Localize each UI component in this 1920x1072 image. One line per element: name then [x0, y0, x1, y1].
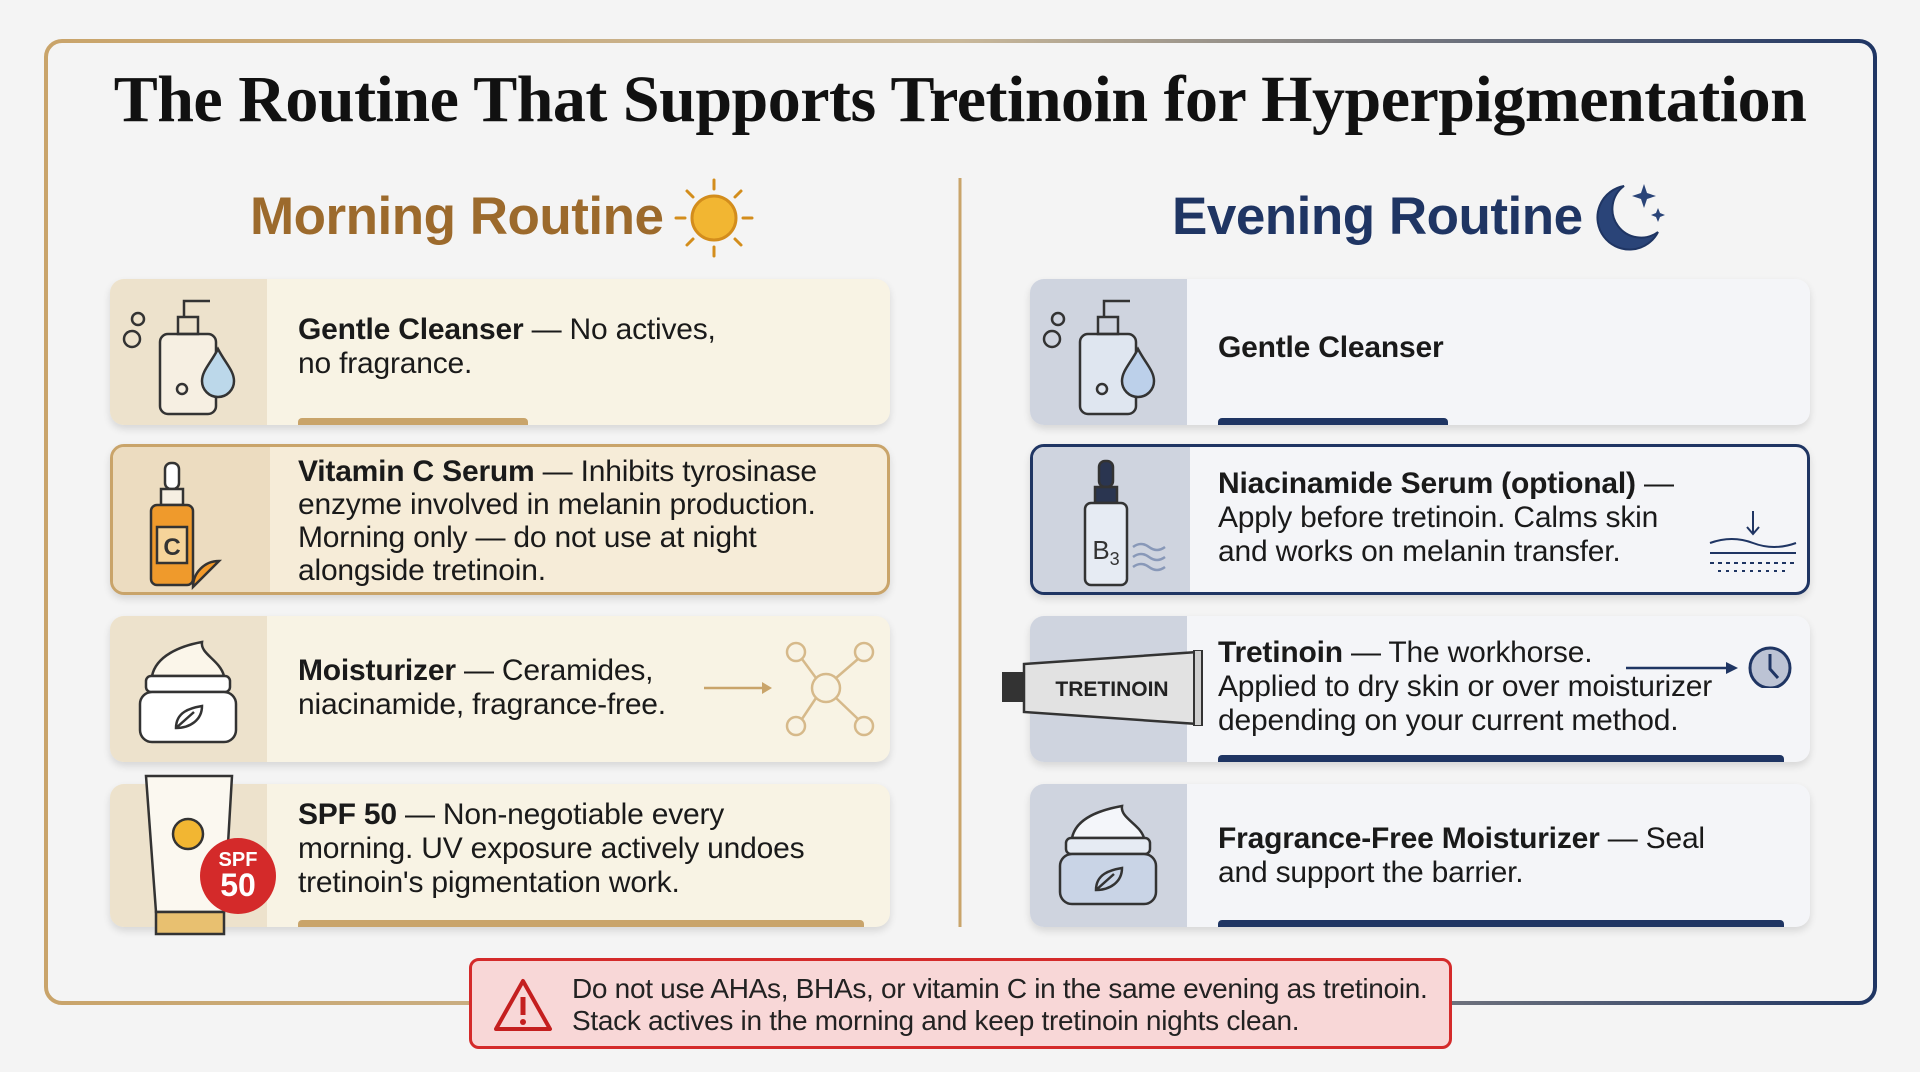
text: and support the barrier. — [1218, 856, 1523, 889]
text: Do not use AHAs, BHAs, or vitamin C in the same evening as tretinoin. — [572, 973, 1428, 1004]
text — [572, 973, 1428, 1036]
text: Gentle Cleanser — [1218, 331, 1443, 364]
text: Moisturizer — Ceramides, — [298, 654, 653, 687]
text — [298, 654, 666, 721]
panel: morning card 3 — [110, 616, 890, 762]
text: tretinoin's pigmentation work. — [298, 866, 680, 899]
text: depending on your current method. — [1218, 704, 1678, 737]
text: Gentle Cleanser — No actives, — [298, 313, 716, 346]
icon: sunscreen tube — [144, 774, 276, 936]
text: morning. UV exposure actively undoes — [298, 832, 804, 865]
text — [1218, 822, 1705, 889]
text: Tretinoin — The workhorse. — [1218, 636, 1592, 669]
text: Morning only — do not use at night — [298, 521, 756, 554]
icon: sun — [674, 178, 754, 258]
text — [1218, 467, 1674, 568]
icon: sunscreen tube: SPF — [219, 849, 257, 871]
text: Apply before tretinoin. Calms skin — [1218, 501, 1658, 534]
icon: B3 serum — [1033, 447, 1190, 598]
icon: warning triangle — [494, 978, 552, 1031]
panel: evening card 3 — [1030, 616, 1810, 762]
icon: cleanser — [1030, 279, 1187, 425]
heading: evening: Evening Routine — [1172, 187, 1583, 246]
text: Applied to dry skin or over moisturizer — [1218, 670, 1712, 703]
text: Vitamin C Serum — Inhibits tyrosinase — [298, 455, 817, 488]
text — [298, 798, 804, 899]
icon: cleanser — [110, 279, 267, 425]
text — [298, 455, 817, 587]
panel: morning card 2 — [110, 444, 890, 595]
icon: B3 serum: 3 — [1110, 549, 1120, 569]
text: Stack actives in the morning and keep tretinoin nights clean. — [572, 1005, 1299, 1036]
text: alongside tretinoin. — [298, 554, 546, 587]
text: enzyme involved in melanin production. — [298, 488, 816, 521]
icon: skin layers — [1710, 511, 1796, 572]
panel: evening card 1 — [1030, 279, 1810, 425]
text — [1218, 636, 1712, 737]
panel: morning card 1 — [110, 279, 890, 425]
panel: morning card 4 — [110, 784, 890, 927]
text: Fragrance-Free Moisturizer — Seal — [1218, 822, 1705, 855]
icon: vitamin C: C — [163, 534, 181, 561]
text: SPF 50 — Non-negotiable every — [298, 798, 724, 831]
icon: arrow + molecule — [704, 642, 874, 736]
icon: B3 serum: B — [1092, 535, 1110, 565]
callout: warning — [469, 958, 1452, 1049]
text: niacinamide, fragrance-free. — [298, 688, 666, 721]
icon: vitamin C — [113, 447, 270, 598]
icon: arrow + clock — [1626, 646, 1792, 688]
icon: tretinoin tube: TRETINOIN — [1055, 678, 1169, 701]
text: Niacinamide Serum (optional) — — [1218, 467, 1674, 500]
panel: evening card 2 — [1030, 444, 1810, 595]
text — [298, 313, 716, 380]
icon: moisturizer jar — [1030, 784, 1187, 927]
heading: morning: Morning Routine — [250, 187, 663, 246]
text: and works on melanin transfer. — [1218, 535, 1621, 568]
icon: tretinoin tube — [1002, 650, 1203, 726]
icon: sunscreen tube: 50 — [220, 867, 256, 903]
icon: moisturizer jar — [110, 616, 267, 762]
panel: evening card 4 — [1030, 784, 1810, 927]
icon: moon — [1596, 184, 1665, 250]
title: The Routine That Supports Tretinoin for Hyperpigmentation — [114, 63, 1806, 136]
text: no fragrance. — [298, 347, 472, 380]
